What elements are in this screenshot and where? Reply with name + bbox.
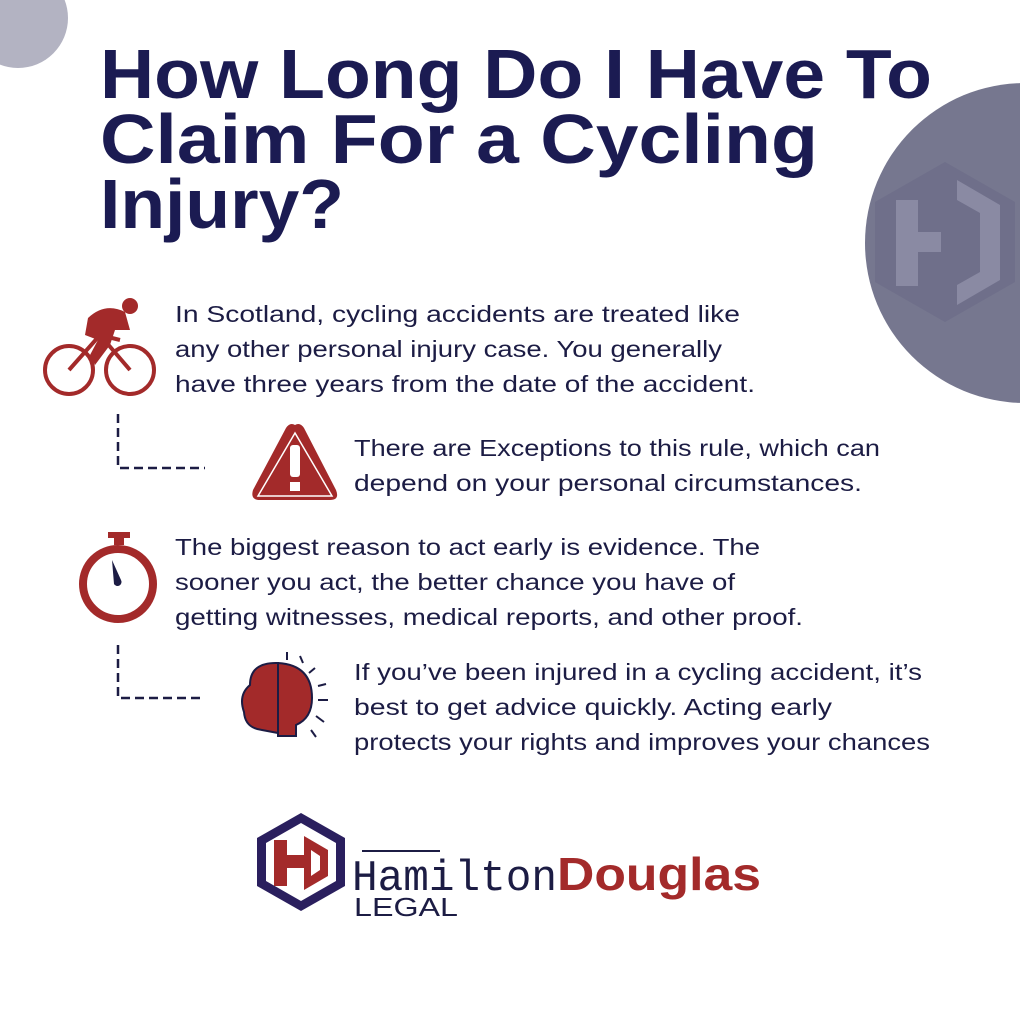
logo	[257, 813, 761, 922]
connector 2	[118, 645, 205, 698]
text block 2	[354, 435, 880, 496]
title: Claim For a Cycling	[100, 100, 818, 178]
text block 2: There are Exceptions to this rule, which can	[354, 435, 880, 461]
text block 3: getting witnesses, medical reports, and other proof.	[175, 604, 803, 630]
text block 3: The biggest reason to act early is evidence. The	[175, 534, 760, 560]
icon: cyclist	[45, 298, 154, 394]
title: How Long Do I Have To	[100, 35, 932, 113]
text block 4: protects your rights and improves your chances	[354, 729, 930, 755]
title: Injury?	[100, 165, 344, 243]
logo: Douglas	[557, 848, 761, 900]
text block 4	[354, 659, 930, 755]
icon: brain bulb	[242, 652, 328, 737]
icon: stopwatch	[83, 532, 153, 619]
text block 1	[175, 301, 755, 397]
text block 4: If you’ve been injured in a cycling accident, it’s	[354, 659, 922, 685]
decorative circle right with HD watermark	[865, 83, 1020, 403]
text block 1: any other personal injury case. You generally	[175, 336, 723, 362]
text block 3	[175, 534, 803, 630]
icon: warning	[252, 424, 337, 500]
logo: LEGAL	[354, 892, 458, 922]
decorative circle top-left	[0, 0, 68, 68]
text block 4: best to get advice quickly. Acting early	[354, 694, 833, 720]
title	[100, 35, 932, 243]
connector 1	[118, 414, 205, 468]
text block 2: depend on your personal circumstances.	[354, 470, 862, 496]
text block 3: sooner you act, the better chance you have of	[175, 569, 736, 595]
text block 1: In Scotland, cycling accidents are treated like	[175, 301, 740, 327]
logo: Hamilton	[352, 854, 557, 904]
text block 1: have three years from the date of the accident.	[175, 371, 755, 397]
